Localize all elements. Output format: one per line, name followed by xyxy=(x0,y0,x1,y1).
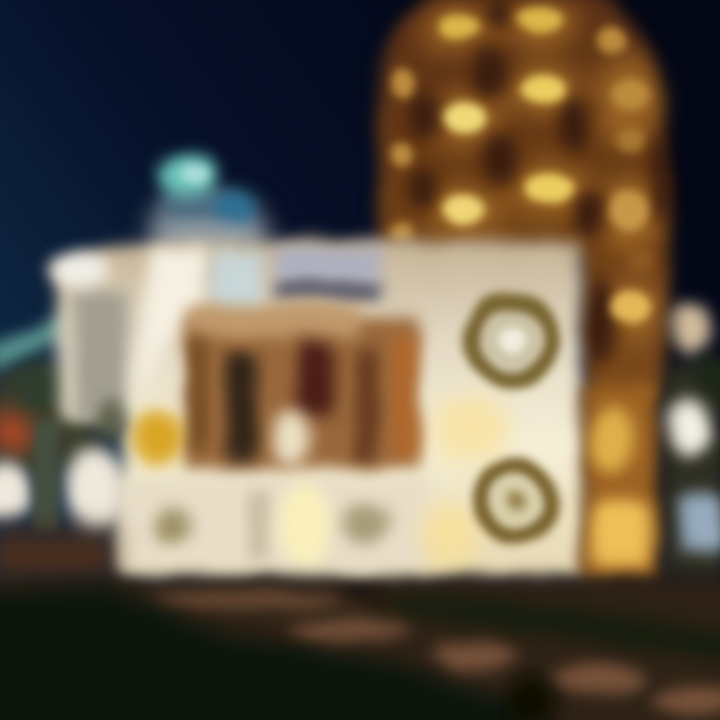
teal canopy xyxy=(0,312,75,372)
small medallion left xyxy=(154,507,190,543)
arch shade xyxy=(355,350,377,460)
lower inner xyxy=(493,479,539,525)
lower ring xyxy=(481,467,551,537)
left annex xyxy=(0,312,125,532)
gold upper light xyxy=(588,408,636,472)
small medallion right xyxy=(341,502,389,542)
tower lit windows xyxy=(389,7,654,324)
window panel xyxy=(212,250,262,308)
pale top glow xyxy=(672,304,712,356)
golden light left xyxy=(132,411,184,465)
warm glow middle xyxy=(430,396,510,464)
upper left wing xyxy=(72,292,128,420)
ground band xyxy=(0,578,720,720)
door shadow xyxy=(338,584,382,600)
dark hedge left xyxy=(0,588,570,720)
recessed grey bay xyxy=(274,248,380,284)
dome dark drum xyxy=(160,189,240,221)
tower xyxy=(378,0,670,400)
dark hedge right xyxy=(370,596,720,662)
foreground ground xyxy=(0,530,720,720)
central arcade xyxy=(98,305,418,468)
arch dark left xyxy=(226,350,256,462)
warm glow xyxy=(279,483,331,567)
tower body xyxy=(378,0,670,400)
dome xyxy=(148,155,268,270)
upper medallion xyxy=(472,300,552,380)
dome highlight xyxy=(181,165,209,185)
blue glow xyxy=(678,495,720,553)
dome blue side xyxy=(216,189,256,221)
lower center xyxy=(506,492,526,512)
orange right edge xyxy=(392,335,418,460)
palm trunk xyxy=(32,420,60,530)
arcade lit top xyxy=(190,305,360,337)
white glow xyxy=(668,398,712,454)
lit column xyxy=(135,250,205,400)
facade xyxy=(52,240,585,578)
bright roof corner xyxy=(52,250,108,290)
lower facade xyxy=(118,478,430,574)
dark foliage xyxy=(696,354,720,402)
upper center xyxy=(498,326,526,354)
lit lower band xyxy=(118,478,430,574)
block body xyxy=(582,385,660,580)
dome base xyxy=(148,194,268,270)
left arch shade xyxy=(188,340,206,450)
dark backdrop xyxy=(665,365,720,580)
dark accent left xyxy=(98,400,126,440)
palm crown xyxy=(16,361,64,409)
gold lower light xyxy=(592,500,650,566)
orange glow xyxy=(0,412,34,452)
arch dark right xyxy=(298,340,334,418)
tower dark lattice xyxy=(409,0,670,362)
upper inner xyxy=(485,313,539,367)
pilaster shade xyxy=(250,490,268,560)
white glow far left xyxy=(0,462,33,522)
right golden block xyxy=(582,385,660,580)
warm path patches xyxy=(150,593,720,714)
left backdrop xyxy=(0,370,100,470)
right tower facade xyxy=(422,300,552,567)
right side structures xyxy=(665,304,720,580)
terrace xyxy=(0,530,115,580)
shrub silhouette xyxy=(504,678,556,720)
upper ring xyxy=(472,300,552,380)
lower medallion xyxy=(481,467,551,537)
warm glow lower xyxy=(422,503,478,567)
white glow near column xyxy=(65,448,125,532)
lit fountain xyxy=(272,412,312,464)
main building xyxy=(52,240,585,578)
arcade body xyxy=(185,318,417,468)
dome teal light xyxy=(158,155,218,197)
shadow below roof xyxy=(276,282,380,300)
tower window halos xyxy=(422,1,666,340)
